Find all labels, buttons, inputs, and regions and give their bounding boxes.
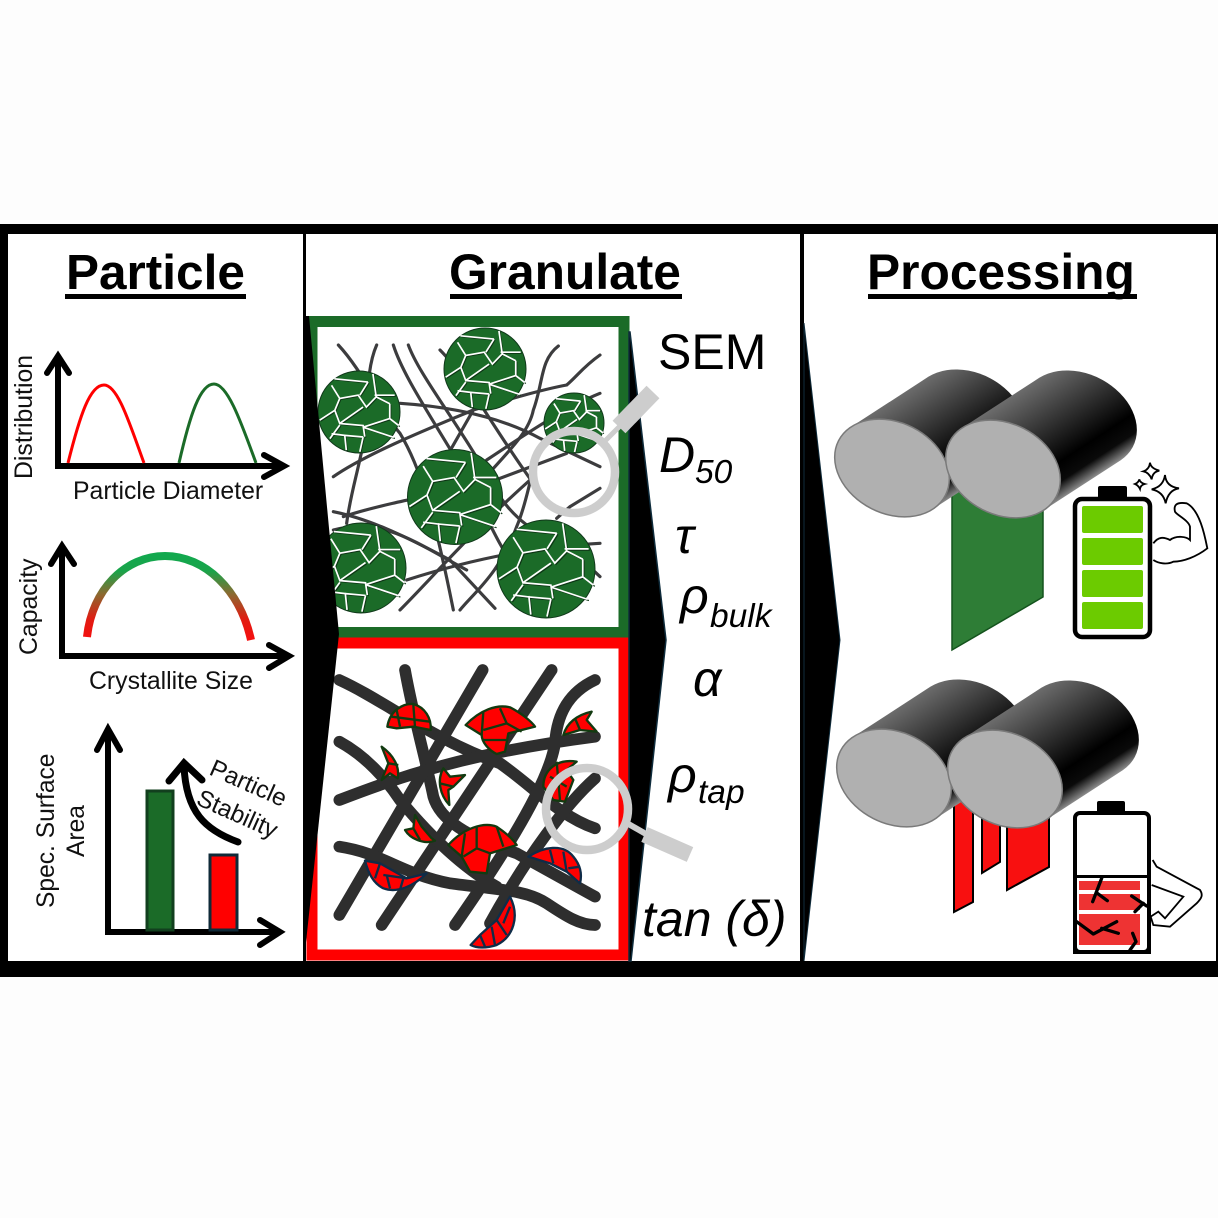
arrow: particle stability: Particle [206, 755, 291, 813]
chart: distribution vs particle diameter [11, 355, 284, 505]
panel: processing [804, 244, 1207, 961]
label: D50: D [659, 427, 695, 483]
icon: strong arm with sparkles [1135, 463, 1207, 563]
calender rollers, bottom [820, 679, 1139, 847]
chart: capacity vs crystallite size: Crystallite Size [89, 668, 253, 695]
arrow: particle stability [169, 755, 291, 845]
label: D50: 50 [695, 454, 733, 491]
chart: capacity vs crystallite size [16, 546, 289, 695]
label: rho bulk: bulk [710, 598, 774, 635]
label: tau: τ [675, 508, 697, 564]
label: D50 [659, 427, 733, 491]
wedge arrow between particle and granulate [303, 316, 339, 961]
chart: specific surface area bars [33, 729, 291, 945]
heading: Processing: Processing [867, 244, 1135, 300]
icon: weak arm [1151, 860, 1202, 927]
wedge arrow between granulate and metrics [629, 332, 666, 961]
label: rho bulk [678, 568, 774, 635]
thin fibres network [333, 345, 600, 610]
label: rho tap [666, 747, 745, 811]
chart: distribution vs particle diameter: Particle Diameter [73, 478, 263, 505]
chart: specific surface area bars: Area [63, 805, 90, 857]
heading: Granulate: Granulate [449, 244, 681, 300]
calender rollers, top [818, 369, 1137, 537]
poor granulate box with red border [312, 643, 624, 955]
panel: granulate [303, 244, 786, 961]
fractured red electrode strips [954, 780, 1049, 912]
wedge arrow between granulate and processing [804, 323, 840, 961]
chart: distribution vs particle diameter: Distribution [11, 355, 38, 479]
outer black frame with three panels [0, 224, 1218, 977]
heading: Particle: Particle [66, 245, 245, 300]
label: rho tap: tap [698, 774, 745, 811]
chart: specific surface area bars: Spec. Surface [33, 754, 60, 908]
label: rho tap: ρ [666, 747, 697, 803]
damaged battery [1073, 801, 1151, 954]
characterisation metrics list [642, 324, 786, 947]
panel: particle [11, 245, 291, 945]
thick fibres network [339, 670, 595, 925]
label: alpha: α [693, 651, 723, 707]
green electrode sheet [952, 480, 1043, 650]
label: tan delta: tan (δ) [642, 891, 786, 947]
healthy battery [1075, 486, 1150, 637]
battery cracks [1077, 878, 1147, 950]
label: rho bulk: ρ [678, 568, 709, 624]
red fragmented particles [382, 704, 597, 873]
magnifier on poor granulate [546, 768, 690, 854]
chart: capacity vs crystallite size: Capacity [16, 558, 43, 655]
good granulate box with green border [312, 322, 624, 632]
magnifier on good granulate [533, 392, 653, 513]
label: SEM: SEM [658, 324, 766, 380]
arrow: particle stability: Stability [193, 785, 282, 845]
green particles [316, 328, 604, 618]
